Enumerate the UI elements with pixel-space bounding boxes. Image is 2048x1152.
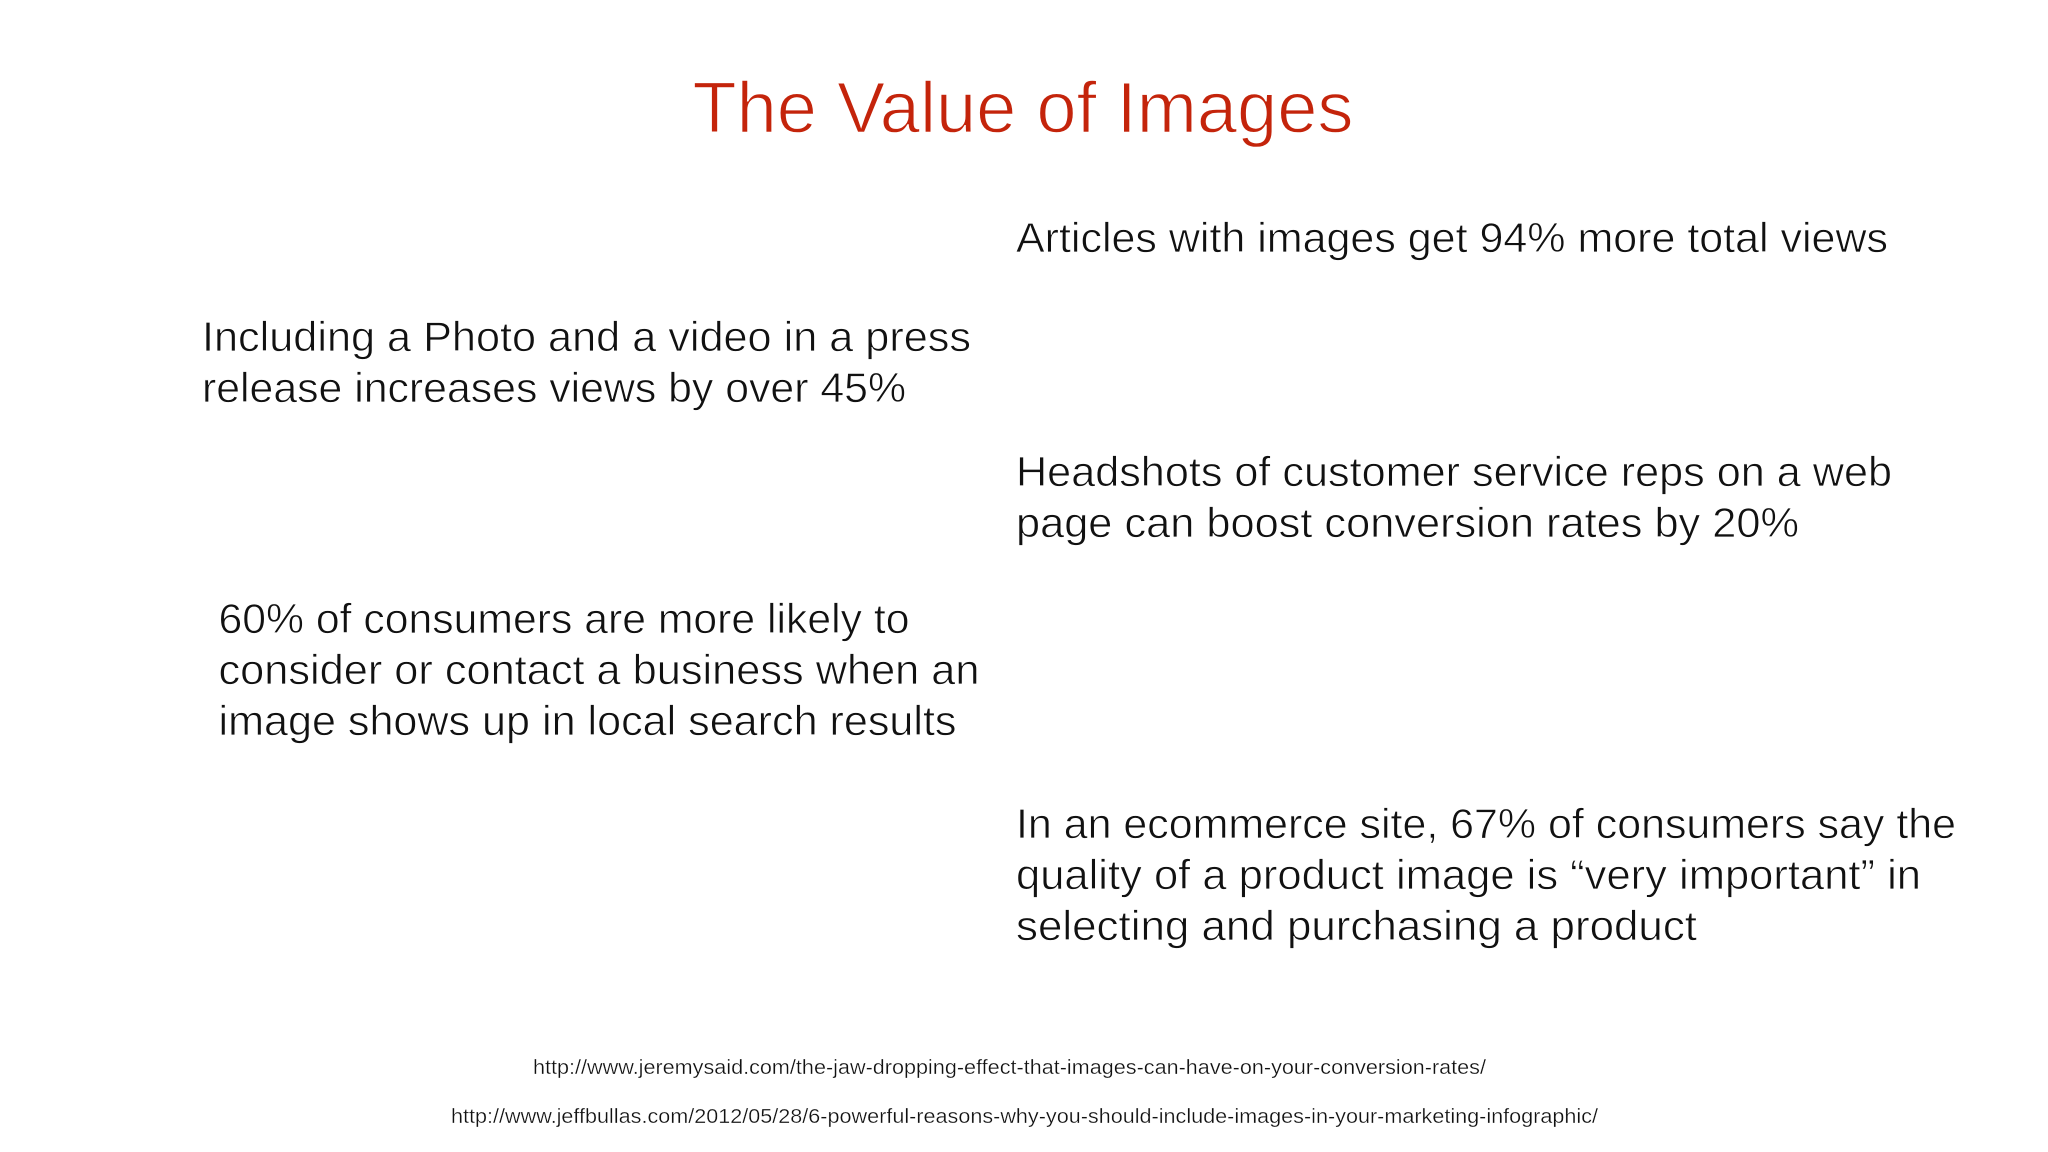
text block: local search results: consider or contact a business when an bbox=[218, 646, 980, 693]
source links: http://www.jeremysaid.com/the-jaw-dropping-effect-that-images-can-have-on-your-conversion-rates/ bbox=[533, 1056, 1486, 1079]
text block: local search results: image shows up in local search results bbox=[218, 697, 956, 744]
source links bbox=[451, 1056, 1598, 1128]
text block: headshots of customer service reps: Headshots of customer service reps on a web bbox=[1016, 448, 1892, 495]
text block: articles with images: Articles with images get 94% more total views bbox=[1016, 214, 1888, 261]
title: The Value of Images bbox=[692, 68, 1354, 148]
text block: headshots of customer service reps: page can boost conversion rates by 20% bbox=[1016, 499, 1799, 546]
text block: photo and video in press release bbox=[202, 313, 971, 411]
text block: ecommerce product image quality: selecting and purchasing a product bbox=[1016, 902, 1697, 949]
source links: http://www.jeffbullas.com/2012/05/28/6-powerful-reasons-why-you-should-include-images-in-your-marketing-infographic/ bbox=[451, 1105, 1598, 1128]
text block: photo and video in press release: Including a Photo and a video in a press bbox=[202, 313, 971, 360]
text block: local search results: 60% of consumers are more likely to bbox=[218, 595, 910, 642]
text block: ecommerce product image quality: quality of a product image is “very important” in bbox=[1016, 851, 1921, 898]
text block: headshots of customer service reps bbox=[1016, 448, 1892, 546]
text block: local search results bbox=[218, 595, 980, 744]
text block: ecommerce product image quality bbox=[1016, 800, 1956, 949]
text block: photo and video in press release: release increases views by over 45% bbox=[202, 364, 906, 411]
text block: ecommerce product image quality: In an ecommerce site, 67% of consumers say the bbox=[1016, 800, 1956, 847]
